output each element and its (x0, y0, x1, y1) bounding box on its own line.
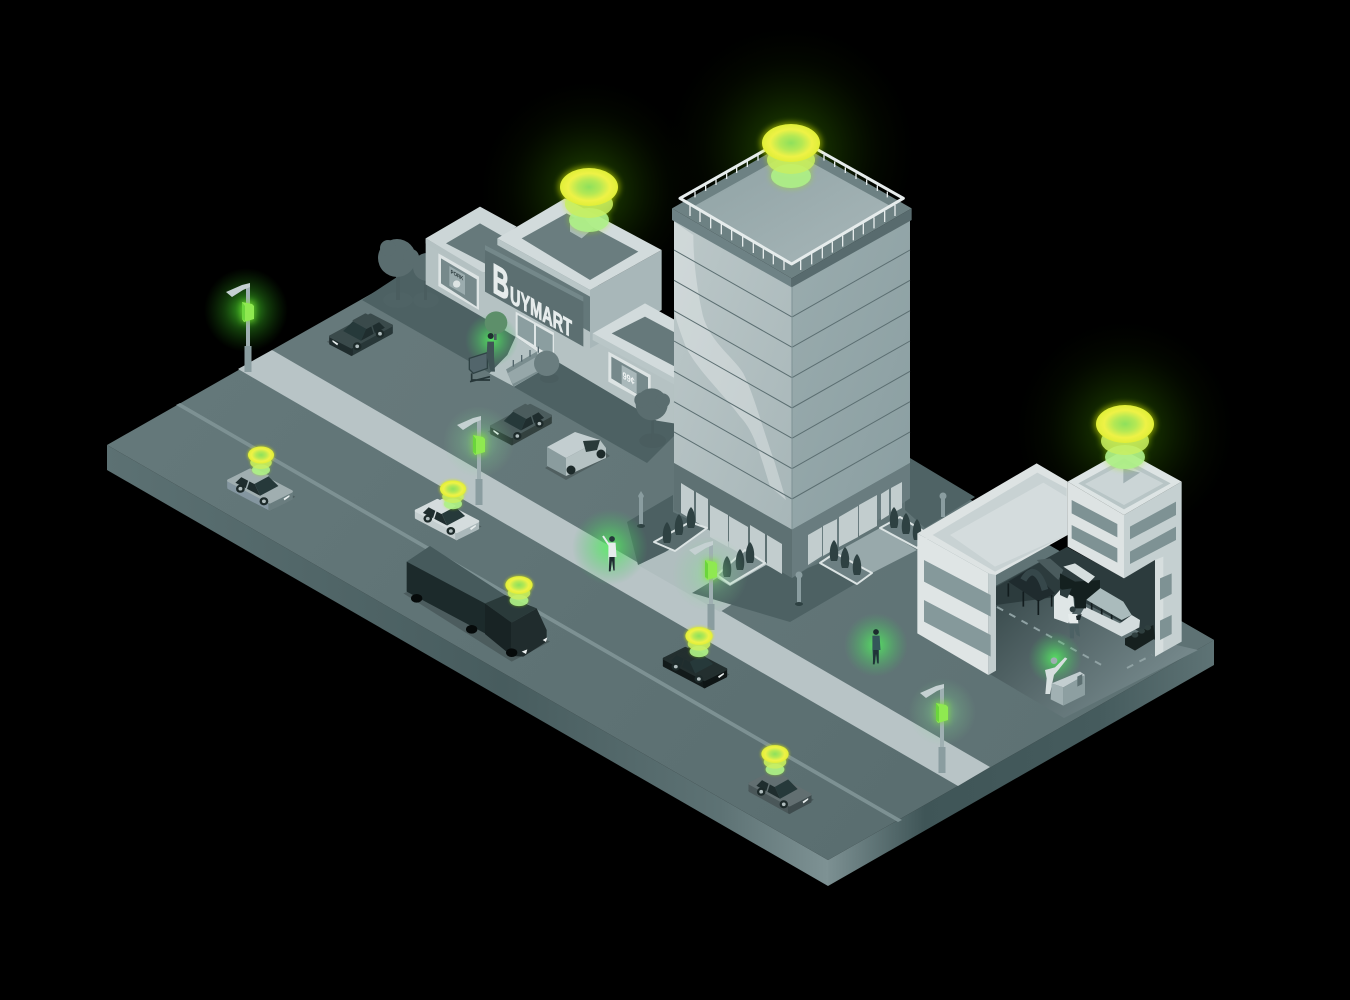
car parked back (327, 314, 393, 356)
factory interior back wall (996, 547, 1155, 640)
store front wall (426, 238, 674, 423)
lane dashes on floor (997, 607, 1152, 668)
kiosk (1054, 588, 1074, 623)
cart rack (506, 347, 542, 387)
lamp: front (920, 684, 949, 773)
doors (516, 312, 554, 363)
lamp glow: parking (443, 406, 515, 478)
halo: back lamp (204, 268, 288, 352)
worker with clipboard (1068, 606, 1082, 638)
planter: front left (717, 542, 765, 584)
beacon: suv (760, 744, 790, 776)
tower left wall (674, 220, 792, 530)
roof railing (680, 135, 903, 270)
lamp: back (226, 283, 255, 372)
left block side (988, 570, 996, 675)
left block front wall (917, 533, 988, 675)
rear belt (1037, 558, 1063, 580)
beacon: factory roof (1094, 403, 1156, 470)
car on road: white sedan (414, 500, 482, 541)
van parked (545, 432, 610, 480)
main unit right wall (590, 250, 662, 348)
right block right windows (1130, 502, 1176, 640)
tree group behind the store (378, 239, 443, 308)
halo: factory beacon (1015, 320, 1235, 540)
third unit roof (593, 303, 675, 385)
beacon: truck (504, 575, 534, 607)
tower roof (693, 152, 892, 265)
tower right wall (792, 220, 910, 530)
glow: pedestrian on sidewalk (572, 509, 648, 585)
car parked front (488, 405, 552, 446)
leg inner edge (1155, 557, 1163, 657)
worker glow (1028, 632, 1082, 685)
right block right wall and leg (1124, 482, 1182, 657)
reflection on wall (674, 222, 786, 500)
pedestrian in lot (872, 629, 880, 664)
road lane line (176, 403, 902, 822)
post lights around plaza (637, 491, 946, 606)
roof vent (570, 215, 593, 238)
lamp: parking (457, 416, 486, 505)
right block left wall (1068, 482, 1124, 578)
ground floor dark band (674, 463, 910, 578)
tree by the third unit (634, 388, 670, 448)
left block roof (917, 463, 1068, 575)
plaza in front of tower (638, 528, 782, 612)
right block roof (1068, 450, 1182, 515)
factory building (917, 450, 1182, 675)
tower building (672, 135, 912, 578)
truck (403, 546, 550, 662)
robot table (1008, 568, 1055, 615)
beacon: black sedan (684, 626, 714, 658)
planter: front right (820, 540, 872, 584)
person glow (465, 313, 518, 367)
scanner gate (1060, 563, 1100, 608)
factory interior equipment (1008, 558, 1155, 706)
halo: store beacon (479, 80, 699, 300)
halo: tower beacon (666, 25, 916, 275)
planter: right of lobby (880, 507, 930, 548)
beacon: grey sedan (247, 446, 275, 476)
left unit window with poster: PORK (451, 269, 464, 283)
shopper with cart (469, 333, 495, 382)
beacon: tower roof (760, 122, 822, 189)
conveyor belt (1080, 585, 1140, 637)
right block left windows (1072, 500, 1117, 563)
lamp glow: front (908, 678, 976, 746)
left unit window with poster (438, 253, 479, 310)
pedestrian on sidewalk (603, 536, 616, 571)
car on road: black sedan (662, 648, 730, 689)
tower shadow on the ground (692, 563, 862, 622)
tower roof rim (672, 140, 912, 287)
tree by the rack (534, 351, 559, 383)
plaza right of tower (835, 528, 917, 573)
main unit roof (497, 198, 662, 297)
lamp glow: plaza (672, 536, 748, 612)
black crate (1125, 625, 1155, 651)
Buymart sign (485, 245, 583, 347)
beacon: store roof (558, 166, 620, 233)
beacon: white sedan (439, 480, 467, 510)
Buymart sign: B (492, 254, 509, 310)
tree by the entrance (485, 311, 507, 340)
rear yard behind tower (905, 455, 975, 528)
factory interior floor (988, 547, 1198, 718)
store: Buymart (426, 198, 675, 448)
left unit roof (426, 207, 517, 277)
Buymart sign: UYMART (510, 282, 572, 343)
lamp: plaza (689, 541, 718, 630)
left block windows (924, 560, 991, 657)
car on road: suv (748, 772, 814, 814)
third unit window with poster (608, 352, 651, 405)
parking lot (272, 225, 1214, 767)
floor lines (674, 250, 910, 530)
lobby windows right (808, 482, 902, 565)
entrance pad (489, 337, 554, 387)
third unit window with poster: 99¢ (623, 370, 635, 388)
packing box (1051, 672, 1085, 706)
planter: left of lobby (654, 507, 707, 551)
sidewalk (238, 350, 990, 786)
worker at box (1045, 657, 1067, 694)
lobby windows left (681, 483, 782, 574)
glow: pedestrian in lot (844, 613, 908, 677)
platform base (107, 225, 1214, 886)
shadow cast beside the tower (627, 495, 707, 565)
store front shadow strip (362, 262, 690, 463)
car on road: grey sedan (227, 469, 295, 511)
